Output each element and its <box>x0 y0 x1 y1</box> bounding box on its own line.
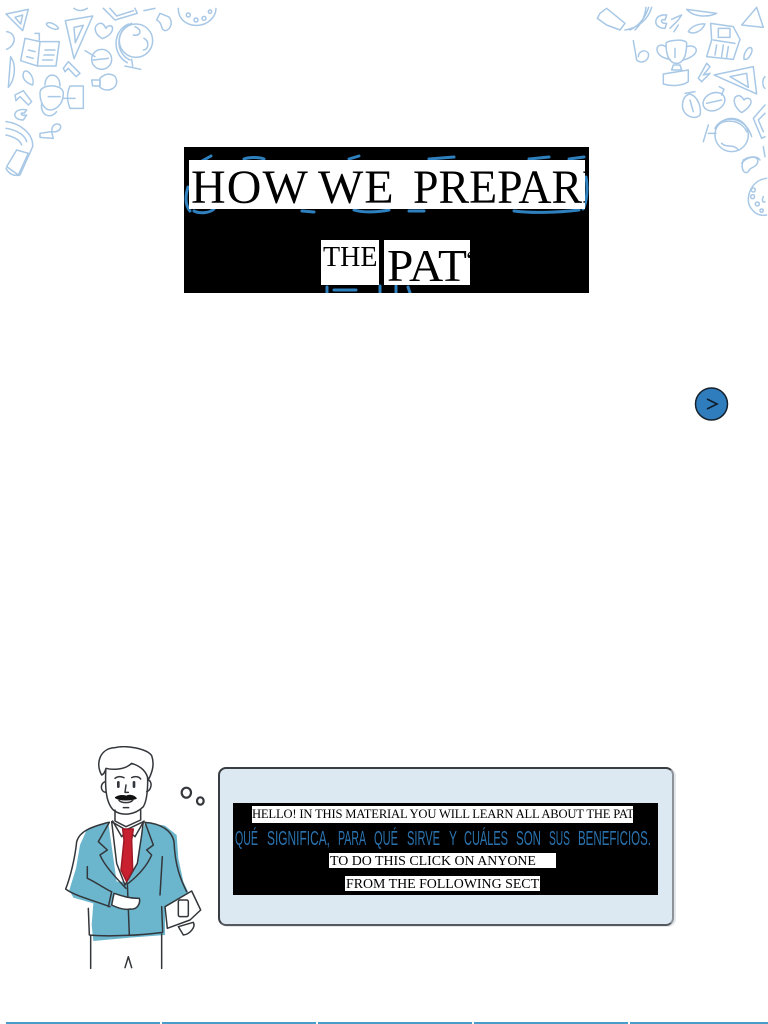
message line 2 in blue: SUS <box>549 828 570 850</box>
message line 1: HELLO! IN THIS MATERIAL YOU WILL LEARN ALL ABOUT THE PAT <box>252 807 633 821</box>
message line 2 in blue: PARA <box>338 828 366 850</box>
red tie <box>121 829 133 882</box>
icon: bulb <box>682 92 700 117</box>
tab 1 <box>6 1022 160 1024</box>
title block <box>184 147 589 293</box>
icon: leaf and feather <box>8 57 33 87</box>
icon: globe <box>116 23 153 69</box>
icon: backpack <box>6 122 33 175</box>
shirt and collar <box>112 821 144 885</box>
tab 3 <box>318 1022 472 1024</box>
icon: ruler triangle <box>714 67 757 94</box>
icon: side book and 3 <box>742 105 765 163</box>
message line 2 in blue: SON <box>516 828 541 850</box>
icon: feather and leaf <box>687 9 717 33</box>
message line 2 in blue: Y <box>449 828 457 850</box>
message line 2 in blue: QUÉ <box>374 827 398 850</box>
icon: book <box>707 23 740 59</box>
trousers <box>91 934 162 968</box>
stray blue lettering behind title <box>184 154 588 293</box>
tab 2 <box>162 1022 316 1024</box>
message line 2 in blue <box>235 827 651 850</box>
icon: book <box>21 33 59 66</box>
icon: ruler triangle <box>65 16 93 59</box>
title line 1 <box>189 160 585 209</box>
icon: flask <box>85 49 112 69</box>
decorative doodles: top right corner <box>597 7 767 215</box>
message line 2 in blue: SIRVE <box>407 828 440 850</box>
icon: clip <box>744 48 752 59</box>
icon: trophy <box>657 40 696 85</box>
icon: backpack <box>597 7 652 30</box>
message line 2 in blue: QUÉ <box>235 827 258 850</box>
message line 2 in blue: SIGNIFICA, <box>267 828 330 850</box>
jacket colour fill <box>69 822 189 941</box>
jacket outline <box>66 822 187 936</box>
message line 2 in blue: CUÁLES <box>464 827 508 850</box>
folder under arm <box>165 891 201 935</box>
message panel <box>218 767 674 926</box>
icon: top books and dish <box>7 8 216 49</box>
icon: bulb <box>92 74 117 90</box>
icon: globe <box>703 118 752 152</box>
icon: set square top <box>742 7 763 27</box>
hair <box>99 747 153 780</box>
icon: flask <box>700 87 728 114</box>
title word: THE <box>321 240 379 285</box>
icon: numerals <box>633 15 758 173</box>
hand <box>112 893 140 909</box>
icon: dish <box>748 77 767 215</box>
next arrow button <box>694 387 728 421</box>
icon: heart <box>95 23 113 39</box>
icon: heart <box>734 96 751 113</box>
tab 5 <box>630 1022 768 1024</box>
bottom navigation tabs <box>6 1022 768 1024</box>
tab 4 <box>474 1022 628 1024</box>
thought bubbles <box>182 788 204 805</box>
title word: THE: THE <box>323 242 377 273</box>
icon: set square <box>6 9 28 31</box>
message black text block <box>233 803 658 895</box>
icon: numerals and small marks <box>15 13 171 138</box>
character: man in blue suit <box>64 746 205 970</box>
icon: trophy <box>40 75 83 116</box>
face <box>116 782 136 808</box>
head <box>101 763 151 827</box>
